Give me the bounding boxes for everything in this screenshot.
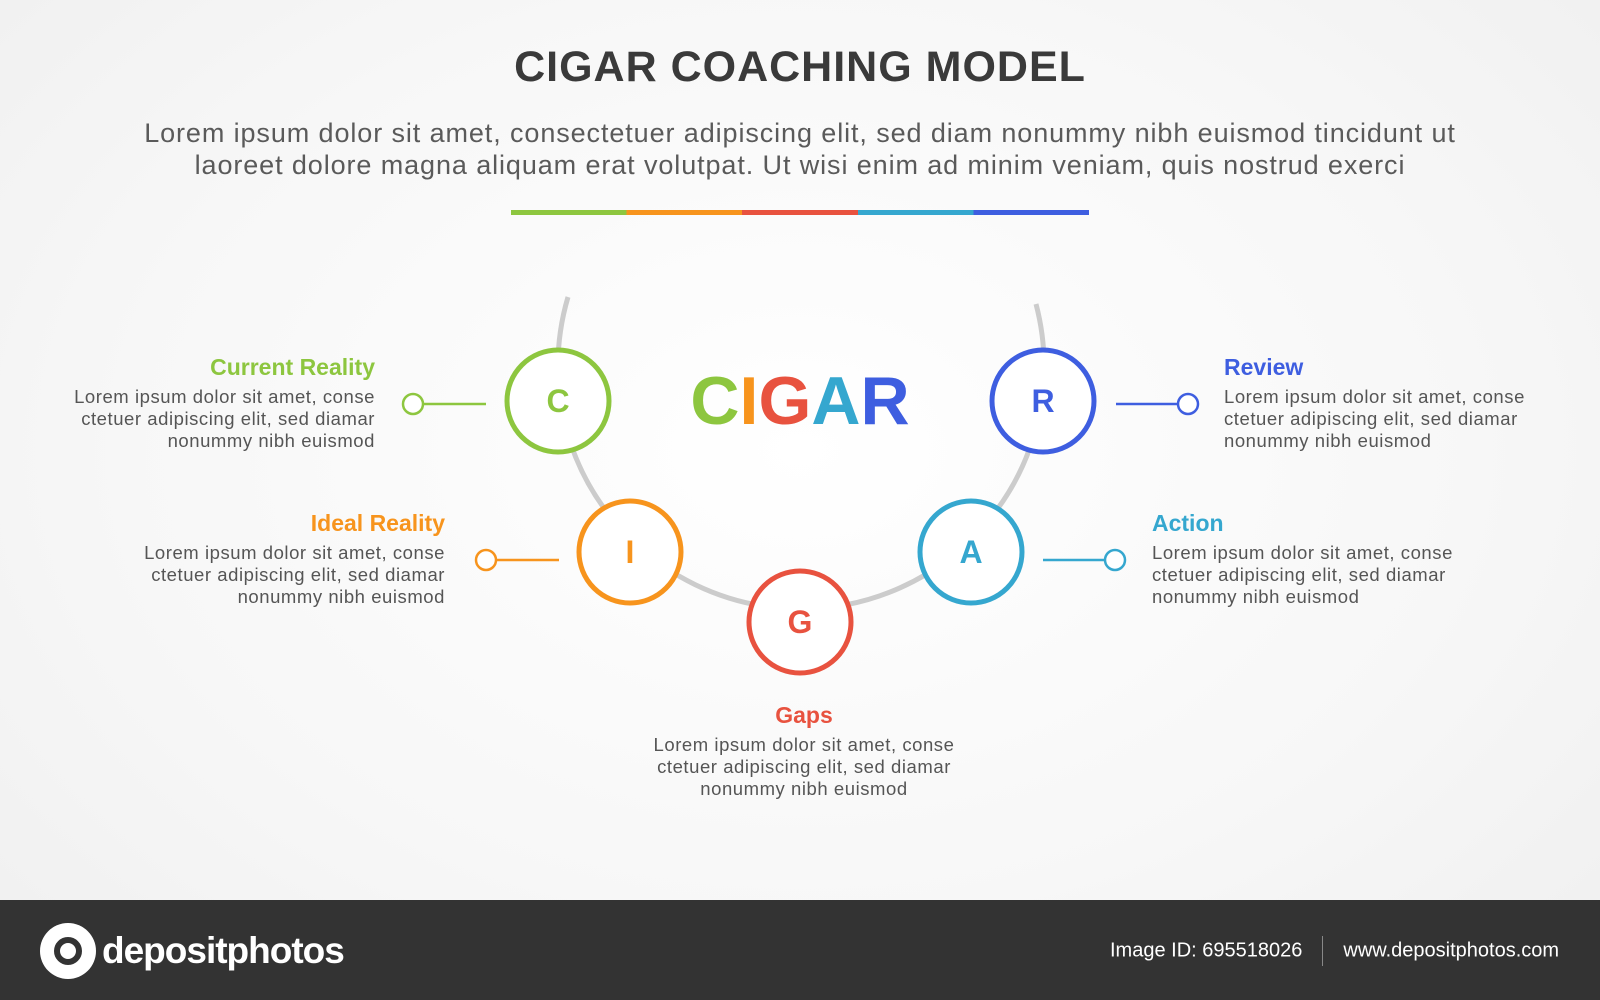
arc — [558, 297, 1044, 609]
connector: A — [1043, 550, 1125, 570]
connector: C — [403, 394, 486, 414]
footer — [0, 900, 1600, 1000]
circle G: G — [788, 604, 812, 640]
circle R — [992, 350, 1094, 452]
text: Action — [1152, 510, 1453, 607]
text: Current Reality — [74, 354, 375, 451]
text: Gaps: ctetuer adipiscing elit, sed diamar — [657, 756, 951, 777]
text: Review: nonummy nibh euismod — [1224, 430, 1431, 451]
text: Current Reality: nonummy nibh euismod — [168, 430, 375, 451]
text: Action: Lorem ipsum dolor sit amet, conse — [1152, 542, 1453, 563]
text: Review: ctetuer adipiscing elit, sed diamar — [1224, 408, 1518, 429]
circle C — [507, 350, 609, 452]
text: Gaps: nonummy nibh euismod — [700, 778, 908, 799]
circle R: R — [1031, 383, 1055, 419]
text: Action: Action — [1152, 510, 1224, 536]
text: Ideal Reality: Ideal Reality — [311, 510, 445, 536]
circle C: C — [546, 383, 570, 419]
footer logo: depositphotos — [102, 930, 344, 971]
color bar — [511, 210, 1089, 215]
circle G — [749, 571, 851, 673]
connector: I — [476, 550, 559, 570]
connector: R — [1116, 394, 1198, 414]
subtitle: Lorem ipsum dolor sit amet, consectetuer adipiscing elit, sed diam nonummy nibh euismod tincidunt ut — [144, 118, 1456, 148]
circle A — [920, 501, 1022, 603]
title: CIGAR COACHING MODEL — [514, 43, 1086, 91]
text: Action: nonummy nibh euismod — [1152, 586, 1359, 607]
text: Current Reality: Lorem ipsum dolor sit amet, conse — [74, 386, 375, 407]
text: Gaps — [654, 702, 954, 799]
text: Ideal Reality: ctetuer adipiscing elit, sed diamar — [151, 564, 445, 585]
subtitle — [144, 118, 1456, 180]
text: Action: ctetuer adipiscing elit, sed diamar — [1152, 564, 1446, 585]
text: Review — [1224, 354, 1525, 451]
center word CIGAR: CIGAR — [690, 363, 910, 439]
text: Ideal Reality: nonummy nibh euismod — [238, 586, 445, 607]
text: Gaps: Lorem ipsum dolor sit amet, conse — [654, 734, 954, 755]
subtitle: laoreet dolore magna aliquam erat volutpat. Ut wisi enim ad minim veniam, quis nostrud exerci — [195, 150, 1405, 180]
circle A: A — [959, 534, 983, 570]
footer info: Image ID: 695518026 www.depositphotos.com — [1110, 939, 1559, 961]
circle I: I — [626, 534, 634, 570]
circle I — [579, 501, 681, 603]
text: Review: Lorem ipsum dolor sit amet, conse — [1224, 386, 1525, 407]
text: Ideal Reality — [144, 510, 445, 607]
text: Current Reality: ctetuer adipiscing elit, sed diamar — [81, 408, 375, 429]
text: Review: Review — [1224, 354, 1303, 380]
text: Ideal Reality: Lorem ipsum dolor sit amet, conse — [144, 542, 445, 563]
text: Current Reality: Current Reality — [210, 354, 375, 380]
footer logo — [40, 923, 344, 979]
text: Gaps: Gaps — [775, 702, 833, 728]
